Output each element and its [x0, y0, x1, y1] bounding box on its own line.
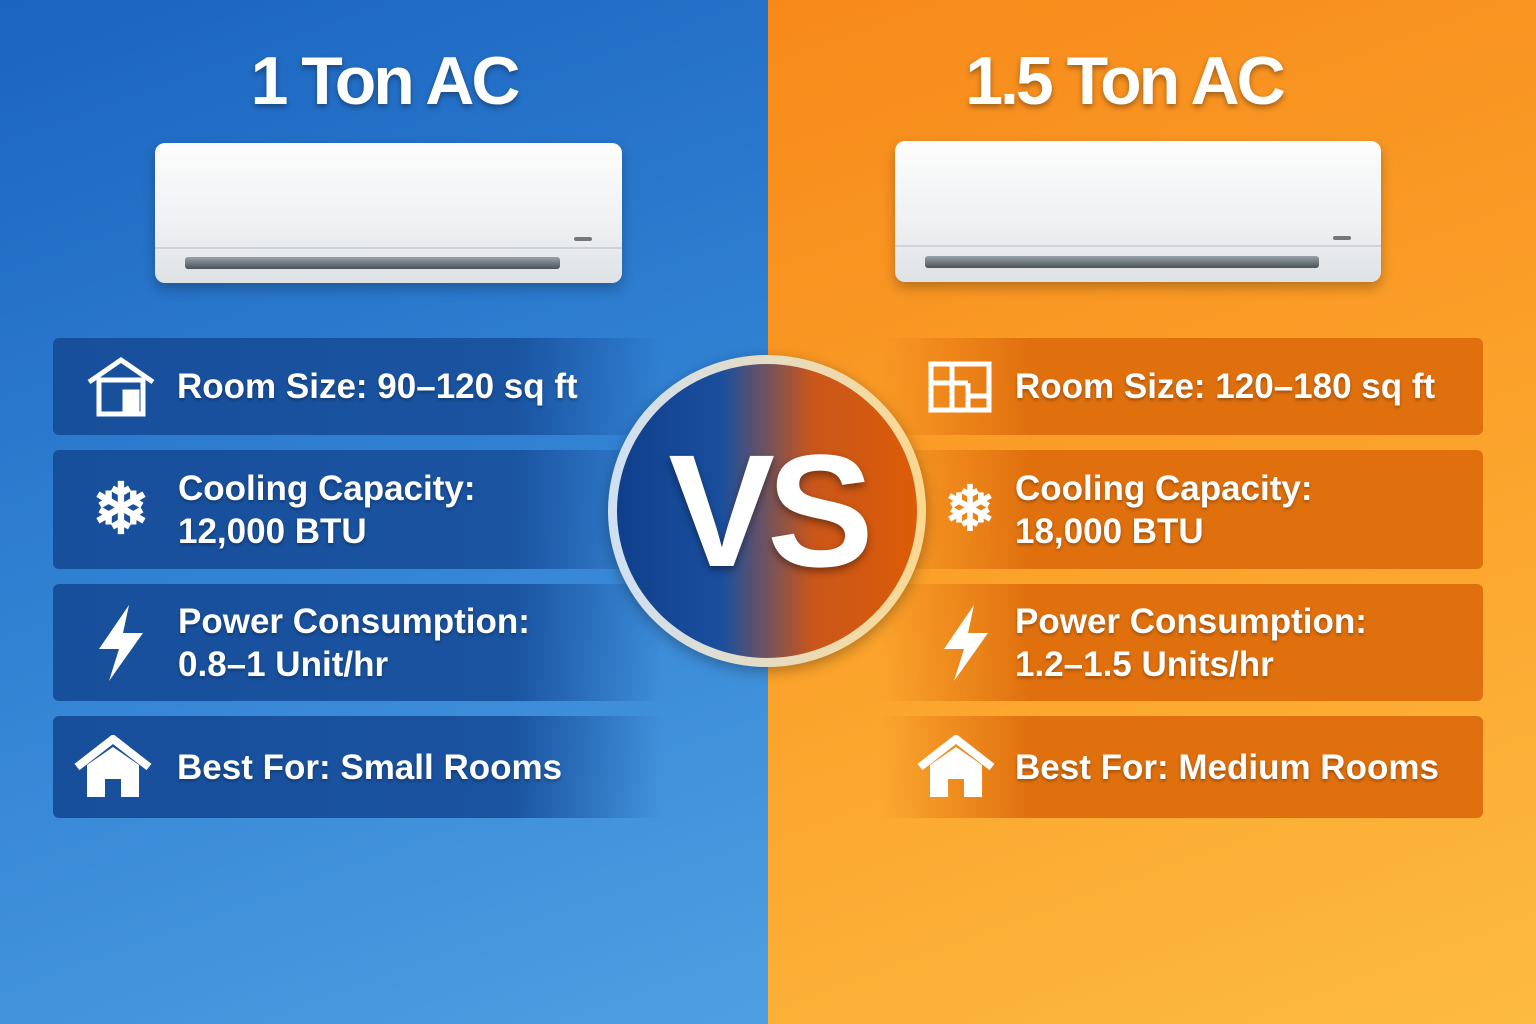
text: cooling: 18,000 BTU	[1015, 512, 1204, 550]
row: right room size	[880, 338, 1483, 435]
row: right power	[880, 584, 1483, 701]
image: 1.5 ton AC unit	[895, 141, 1381, 282]
text: power: 0.8–1 Unit/hr	[178, 644, 388, 684]
text: best for: Best For: Small Rooms	[177, 748, 562, 786]
row: left power	[53, 584, 663, 701]
text: cooling: Cooling Capacity:	[1015, 468, 1313, 508]
icon: building	[88, 357, 154, 416]
panel: 1 ton background	[0, 0, 768, 1024]
text: power: Power Consumption:	[178, 602, 530, 640]
text: power: Power Consumption:	[1015, 602, 1367, 640]
text: cooling: 12,000 BTU	[178, 512, 367, 550]
image: 1 ton AC unit	[155, 143, 622, 283]
icon: floor plan	[928, 362, 992, 412]
text: power: 1.2–1.5 Units/hr	[1015, 644, 1274, 684]
text: cooling: Cooling Capacity:	[178, 468, 476, 508]
row: left room size	[53, 338, 663, 435]
text: cooling	[1014, 468, 1313, 552]
icon: bolt	[99, 605, 143, 681]
badge: VS circle	[608, 355, 926, 667]
panel: 1.5 ton background	[768, 0, 1536, 1024]
text: room size: Room Size: 90–120 sq ft	[177, 367, 578, 406]
text: power	[1015, 602, 1367, 684]
text: power	[178, 602, 530, 684]
row: right cooling	[880, 450, 1483, 569]
row: left cooling	[53, 450, 663, 569]
title: 1.5 Ton AC: 1.5 Ton AC	[965, 43, 1283, 119]
icon: snowflake: ❄	[944, 475, 996, 544]
title: 1 Ton AC: 1 Ton AC	[251, 43, 517, 119]
icon: bolt	[944, 605, 988, 681]
row: left best for	[53, 716, 663, 818]
icon: snowflake: ❄	[92, 470, 150, 548]
icon: house	[74, 735, 152, 797]
text: room size: Room Size: 120–180 sq ft	[1015, 367, 1435, 406]
icon: house	[918, 735, 994, 797]
badge: VS circle: VS	[668, 421, 866, 600]
text: cooling	[178, 468, 476, 552]
text: best for: Best For: Medium Rooms	[1015, 748, 1439, 786]
row: right best for	[880, 716, 1483, 818]
